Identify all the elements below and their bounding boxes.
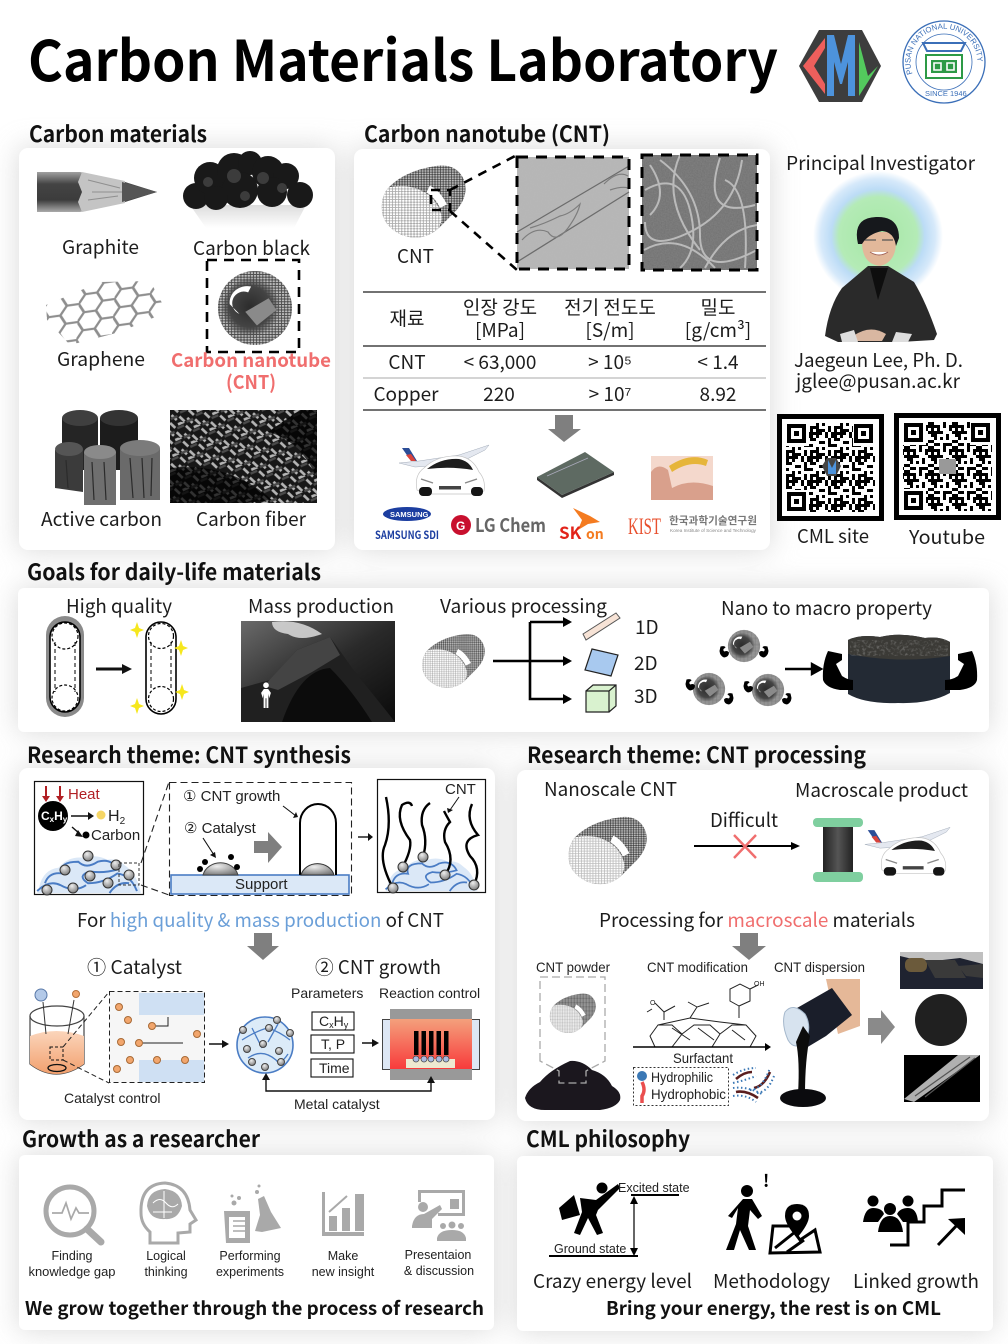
- table: CNT vs copper: < 1.4: [697, 348, 739, 375]
- arrow tree to 1D, 2D, 3D: [493, 617, 572, 704]
- logo: LG Chem: LG Chem: [475, 511, 546, 538]
- arrow: blocked nano to macro: [694, 835, 800, 858]
- diagram: growth mechanism on support: x: [50, 815, 55, 824]
- label: surfactant: Surfactant: [673, 1050, 733, 1066]
- heading: goals: Goals for daily-life materials: [27, 555, 321, 587]
- diagram: chemical functionalization: O: [650, 1000, 656, 1007]
- label: graphite: Graphite: [62, 233, 139, 260]
- image: CNT tube: [568, 817, 647, 884]
- label: finding knowledge gap: Finding: [52, 1249, 93, 1263]
- label: 1D: 1D: [635, 613, 659, 640]
- table: CNT vs copper: [g/cm³]: [685, 316, 751, 343]
- label: performing experiments: experiments: [216, 1265, 284, 1279]
- legend: hydrophilic / hydrophobic: [634, 1068, 774, 1106]
- logo: Pusan National University seal: SINCE 1946: [925, 89, 967, 98]
- icon: presentation: [412, 1190, 466, 1241]
- icon: three strong CNTs: [686, 630, 792, 706]
- diagram: zoomed growth inset: ① CNT growth: [183, 788, 280, 805]
- image: carbon black: [183, 151, 313, 228]
- label: carbon nanotube: Carbon nanotube: [171, 346, 331, 373]
- image: macroscopic CNT block with arms: [823, 635, 977, 703]
- panel: carbon nanotube: [354, 117, 770, 550]
- arrowhead: [122, 664, 132, 674]
- image: CNT tube: [382, 166, 466, 238]
- label: catalyst control: Catalyst control: [64, 1090, 160, 1106]
- image: SEM micrograph: [642, 155, 757, 270]
- label: carbon nanotube: [171, 346, 331, 395]
- logo: SK on: SK: [559, 519, 582, 544]
- icon: amorphous coated tube: [46, 616, 84, 717]
- image: CNT end view: [218, 271, 292, 345]
- label: nanoscale CNT: Nanoscale CNT: [544, 775, 677, 802]
- label: CNT growth: ② CNT growth: [315, 953, 441, 980]
- logo: Samsung SDI: [375, 507, 439, 543]
- subheading: processing for macroscale materials: Processing for macroscale materials: [599, 906, 915, 933]
- label: CNT powder: CNT powder: [536, 959, 610, 975]
- shape: 1D rod: [583, 613, 620, 640]
- logo: CML hexagon: [799, 30, 881, 102]
- icon: beaker and flask: [224, 1184, 281, 1243]
- dashed highlight box: [207, 260, 299, 352]
- image: graphite pencil: [37, 172, 157, 212]
- image: fiber spool: [813, 818, 863, 882]
- label: CNT dispersion: CNT dispersion: [774, 959, 865, 975]
- panel: CNT synthesis: [19, 738, 495, 1120]
- table: CNT vs copper: 전기 전도도: [564, 293, 656, 320]
- label: carbon nanotube: (CNT): [226, 368, 276, 395]
- diagram: growth mechanism on support: H: [54, 809, 63, 823]
- table: CNT vs copper: 인장 강도: [463, 293, 537, 320]
- arrow: to products: [868, 1010, 895, 1044]
- arrow: surfactant path: [633, 1043, 771, 1051]
- label: linked growth: Linked growth: [853, 1267, 979, 1294]
- feedback loop: metal catalyst: [262, 1073, 435, 1091]
- arrow: nano to macro: [785, 664, 821, 674]
- table: CNT vs copper: 밀도: [701, 293, 735, 320]
- logo: LG Chem: [451, 511, 546, 538]
- label: performing experiments: [216, 1249, 284, 1279]
- diagram: CNT forest: CNT: [445, 781, 476, 798]
- label: catalyst: ① Catalyst: [87, 953, 182, 980]
- QR code: CML site: [777, 414, 884, 521]
- table: CNT vs copper: 220: [483, 380, 515, 407]
- label: crazy energy level: Crazy energy level: [533, 1267, 692, 1294]
- image: flexible device on finger: [651, 456, 713, 500]
- label: make new insight: Make: [328, 1249, 358, 1263]
- heading: CNT synthesis: Research theme: CNT synthesis: [27, 738, 351, 770]
- logo: Pusan National University seal: [902, 20, 986, 104]
- label: macroscale product: Macroscale product: [795, 776, 968, 803]
- logo: KIST: [628, 513, 757, 539]
- label: logical thinking: [144, 1249, 188, 1279]
- parameter boxes: C: [319, 1013, 329, 1029]
- diagram: chemical functionalization: [647, 981, 764, 1047]
- label: performing experiments: Performing: [219, 1249, 281, 1263]
- heading: principal investigator: Principal Investigator: [786, 149, 976, 176]
- diagram: growth mechanism on support: [34, 782, 169, 895]
- icon: energy diagram with hero: Excited state: [618, 1181, 690, 1195]
- diagram: chemical functionalization: OH: [754, 981, 764, 988]
- name and email: [794, 346, 963, 394]
- label: CNT modification: CNT modification: [647, 959, 748, 975]
- label: finding knowledge gap: [28, 1249, 116, 1279]
- image: TEM micrograph: [517, 157, 629, 269]
- image: CNT disc: [915, 994, 967, 1046]
- label: metal catalyst: Metal catalyst: [294, 1096, 380, 1112]
- principal investigator: [777, 149, 1001, 550]
- label: methodology: Methodology: [713, 1267, 830, 1294]
- arrow: to metal catalyst: [209, 1040, 229, 1048]
- QR code: Youtube: [894, 413, 1001, 520]
- logo: SK on: [559, 508, 604, 544]
- parameter boxes: T, P: [321, 1036, 345, 1052]
- image: battery pouch: [537, 452, 614, 498]
- label: various processing: Various processing: [440, 592, 607, 619]
- icon: head with brain: [141, 1183, 196, 1243]
- icon: walker and map pin: !: [763, 1167, 769, 1192]
- diagram: catalyst pore inset: [110, 992, 204, 1082]
- table: CNT vs copper: CNT: [388, 348, 426, 375]
- diagram: zoomed growth inset: Support: [235, 876, 288, 893]
- image: CNT film rolls: [900, 952, 983, 989]
- diagram: growth mechanism on support: Heat: [68, 786, 101, 803]
- icon: clean tube with sparkles: [130, 622, 189, 714]
- label: parameters: Parameters: [291, 985, 363, 1001]
- label: CNT: CNT: [397, 242, 434, 269]
- logo: Pusan National University seal: PUSAN NATIONAL UNIVERSITY: [905, 23, 983, 75]
- table: CNT vs copper: 재료: [390, 304, 424, 331]
- image: CNT fiber micrograph: [904, 1055, 980, 1102]
- label: logical thinking: thinking: [144, 1265, 188, 1279]
- heading: carbon nanotube: Carbon nanotube (CNT): [364, 117, 610, 149]
- table: CNT vs copper: > 10⁵: [588, 348, 632, 375]
- icon: people with stairs: [863, 1190, 965, 1245]
- heading: carbon materials: Carbon materials: [29, 117, 207, 149]
- name and email: Jaegeun Lee, Ph. D.: [794, 346, 963, 373]
- label: active carbon: Active carbon: [41, 505, 162, 532]
- parameter boxes: x: [329, 1020, 334, 1030]
- arrow: to furnace: [362, 1039, 379, 1047]
- diagram: growth mechanism on support: y: [63, 815, 68, 824]
- label: make new insight: new insight: [312, 1265, 375, 1279]
- label: presentation and discussion: [404, 1248, 474, 1278]
- panel: CNT processing: [517, 738, 989, 1121]
- diagram: catalyst reactor: [30, 989, 109, 1083]
- diagram: furnace reactor: [382, 1009, 480, 1080]
- arrow: down: [732, 933, 766, 960]
- diagram: zoomed growth inset: ② Catalyst: [184, 820, 257, 837]
- shape: 3D cube: [586, 685, 616, 712]
- shape: 2D sheet: [585, 649, 618, 676]
- parameter boxes: H: [334, 1013, 344, 1029]
- image: graphene sheet: [46, 281, 167, 345]
- legend: hydrophilic / hydrophobic: Hydrophobic: [651, 1086, 726, 1102]
- heading: growth as a researcher: Growth as a researcher: [22, 1122, 260, 1154]
- label: CML site: CML site: [797, 522, 869, 549]
- heading: CML philosophy: CML philosophy: [526, 1122, 690, 1154]
- table: CNT vs copper: Copper: [373, 380, 439, 407]
- label: presentation and discussion: & discussion: [404, 1264, 474, 1278]
- slogan: research growth: We grow together through the process of research: [25, 1294, 484, 1321]
- label: carbon black: Carbon black: [193, 234, 311, 261]
- zoom box and leader lines: [431, 155, 517, 270]
- portrait: [813, 171, 943, 342]
- logo: KIST: KIST: [628, 514, 661, 539]
- icon: magnifier with pulse: [46, 1187, 101, 1242]
- label: logical thinking: Logical: [146, 1249, 186, 1263]
- title: Carbon Materials Laboratory: [28, 17, 778, 98]
- image: plane and car: [399, 445, 489, 496]
- label: make new insight: [312, 1249, 375, 1279]
- diagram: metal catalyst particle: [237, 1016, 294, 1073]
- diagram: growth mechanism on support: C: [41, 809, 50, 823]
- slogan: CML: Bring your energy, the rest is on CML: [606, 1294, 941, 1321]
- diagram: CNT powder with zoom: [525, 977, 620, 1110]
- panel: carbon materials: [19, 117, 335, 550]
- diagram: growth mechanism on support: Carbon: [91, 827, 140, 844]
- logo: Samsung SDI: SAMSUNG SDI: [375, 527, 439, 543]
- arrow: down: [247, 933, 279, 960]
- legend: hydrophilic / hydrophobic: Hydrophilic: [651, 1069, 713, 1085]
- image: mountain with small person: [241, 621, 395, 722]
- table: CNT vs copper: 8.92: [700, 380, 736, 407]
- arrow: to grown forest: [358, 833, 373, 841]
- table: CNT vs copper: < 63,000: [464, 348, 536, 375]
- logo: Samsung SDI: SAMSUNG: [390, 510, 429, 519]
- label: difficult: Difficult: [710, 806, 778, 833]
- image: CNT tube: [422, 634, 485, 688]
- diagram: CNT forest: [378, 780, 486, 893]
- parameter boxes: [311, 1012, 354, 1077]
- image: active carbon: [55, 410, 160, 505]
- label: Youtube: Youtube: [908, 523, 985, 550]
- panel: goals for daily-life materials: [18, 555, 989, 732]
- icon: walker and map pin: [726, 1167, 820, 1253]
- arrow: to clean tube: [96, 668, 124, 670]
- label: nano to macro property: Nano to macro property: [721, 594, 932, 621]
- label: reaction control: Reaction control: [379, 985, 480, 1001]
- label: presentation and discussion: Presentaion: [405, 1248, 471, 1262]
- icon: energy diagram with hero: [549, 1181, 690, 1256]
- icon: energy diagram with hero: Ground state: [554, 1242, 626, 1256]
- label: carbon fiber: Carbon fiber: [196, 505, 307, 532]
- label: mass production: Mass production: [248, 592, 394, 619]
- diagram: growth mechanism on support: H: [108, 808, 120, 825]
- logo: KIST: 한국과학기술연구원: [669, 513, 757, 528]
- label: high quality: High quality: [66, 592, 172, 619]
- heading: CNT processing: Research theme: CNT processing: [527, 738, 866, 770]
- parameter boxes: Time: [319, 1060, 350, 1076]
- subheading: goal of synthesis: For high quality & mass production of CNT: [77, 906, 444, 933]
- table: CNT vs copper: [S/m]: [585, 316, 635, 343]
- panel: growth as a researcher: [19, 1122, 494, 1330]
- arrow: down to applications: [548, 415, 581, 442]
- logo: KIST: Korea Institute of Science and Technology: [670, 528, 757, 533]
- diagram: zoomed growth inset: [170, 782, 352, 896]
- logo: LG Chem: G: [456, 519, 465, 533]
- icon: rising chart: [322, 1192, 364, 1236]
- label: 3D: 3D: [634, 682, 658, 709]
- label: 2D: 2D: [634, 649, 658, 676]
- logo: SK on: on: [586, 524, 604, 544]
- panel: CML philosophy: [517, 1122, 993, 1331]
- parameter boxes: y: [344, 1020, 349, 1030]
- label: graphene: Graphene: [57, 345, 145, 372]
- table: CNT vs copper: > 10⁷: [589, 380, 632, 407]
- table: CNT vs copper: [363, 292, 766, 410]
- diagram: growth mechanism on support: 2: [120, 816, 126, 827]
- image: plane and car: [865, 827, 950, 876]
- table: CNT vs copper: [MPa]: [475, 316, 525, 343]
- image: carbon fiber weave: [170, 410, 317, 503]
- image: pouring CNT dispersion bottle: [780, 979, 860, 1107]
- label: finding knowledge gap: knowledge gap: [28, 1265, 116, 1279]
- name and email: jglee@pusan.ac.kr: [795, 367, 961, 394]
